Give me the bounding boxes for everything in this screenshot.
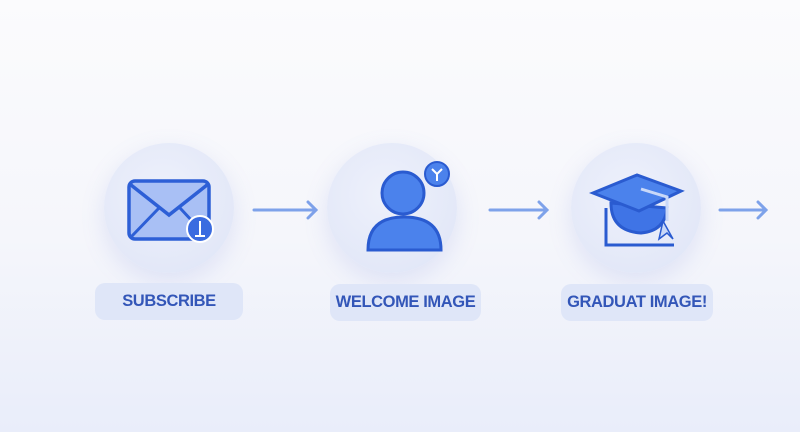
label: graduate: GRADUAT IMAGE!: [567, 293, 707, 311]
arrow 1: [252, 200, 318, 220]
label: welcome: [330, 284, 481, 321]
label: subscribe: [95, 283, 243, 320]
icon: graduation cap: [589, 173, 685, 246]
icon: envelope: [127, 179, 214, 243]
arrow 3: [718, 200, 768, 220]
label: subscribe: SUBSCRIBE: [122, 292, 216, 310]
circle: welcome: [327, 143, 457, 273]
circle: graduate: [571, 143, 701, 273]
label: welcome: WELCOME IMAGE: [336, 293, 475, 311]
icon: user: [366, 161, 450, 252]
arrow 2: [488, 200, 549, 220]
label: graduate: [561, 284, 713, 321]
circle: subscribe: [104, 143, 234, 273]
